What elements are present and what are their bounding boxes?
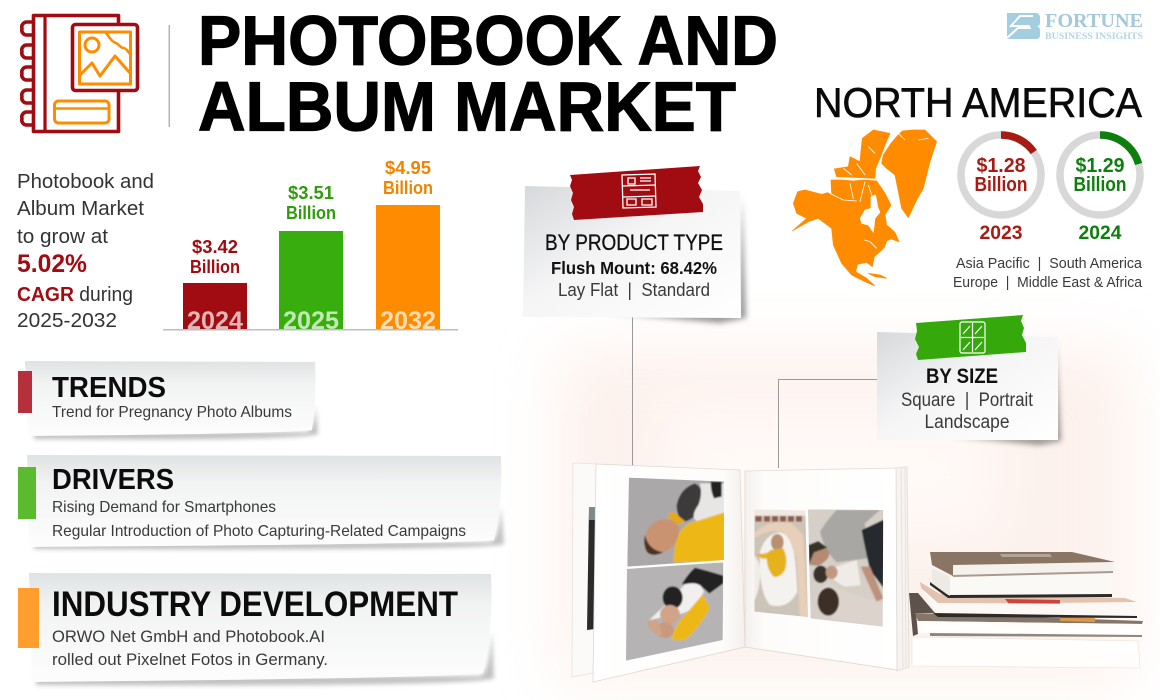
divider (168, 25, 170, 127)
bar 2032: $4.95 (385, 158, 431, 178)
bar 2025: $3.51 (288, 183, 334, 203)
bar 2024: $3.42 (192, 237, 238, 257)
bar 2032: Billion (383, 178, 433, 198)
text: market growth summary: 2025-2032 (17, 309, 117, 332)
title: PHOTOBOOK AND (198, 2, 778, 80)
bar chart: market size (183, 158, 440, 335)
panel: by size: Landscape (924, 412, 1010, 433)
panel: industry development: ORWO Net GmbH and Photobook.AI (52, 627, 325, 646)
tape: green (915, 315, 1026, 360)
donut: 2024 value: $1.29 (1076, 155, 1124, 177)
book 5 (912, 637, 1140, 668)
text: market growth summary: CAGR during (17, 283, 133, 306)
icon: photobook (22, 16, 138, 132)
icon: album layout (622, 174, 656, 208)
bar 2024: 2024 (187, 307, 243, 335)
photo: toddler kissing baby (623, 562, 727, 662)
bar 2032 (376, 158, 440, 335)
book 2 (930, 568, 1112, 598)
donut: 2023 value: 2023 (980, 223, 1022, 244)
photo: newborn in crib (753, 508, 809, 618)
panel: drivers: DRIVERS (52, 464, 174, 496)
bar 2032: 2032 (380, 307, 436, 335)
book 1 (930, 552, 1115, 577)
stack of books (909, 552, 1143, 668)
donut: 2023 value (961, 135, 1041, 244)
panel: by product type: BY PRODUCT TYPE (545, 230, 723, 255)
donut: 2024 value: 2024 (1078, 223, 1122, 244)
panel: trends: TRENDS (52, 372, 166, 404)
text: market growth summary: 5.02% (17, 250, 87, 278)
donut: 2023 value: Billion (974, 174, 1028, 196)
bar 2025 (279, 183, 343, 335)
text: market growth summary (17, 170, 154, 332)
text: market growth summary: to grow at (17, 225, 108, 248)
photo album (572, 463, 909, 682)
bar 2024 (183, 237, 247, 335)
panel: industry development: rolled out Pixelnet Fotos in Germany. (52, 650, 328, 669)
bar 2025: Billion (286, 203, 336, 223)
panel: drivers: Rising Demand for Smartphones (52, 499, 276, 516)
bar 2025: 2025 (283, 307, 339, 335)
panel: industry development (18, 573, 494, 685)
text: market growth summary: Photobook and (17, 170, 154, 193)
album back covers and page edges (572, 463, 909, 677)
photo: parents lying down (807, 508, 885, 628)
connector lines (632, 316, 878, 468)
panel: by product type (523, 166, 746, 323)
text: other regions (953, 255, 1143, 291)
book 3 (920, 582, 1137, 618)
album right page (745, 468, 897, 670)
panel: trends (18, 361, 318, 439)
icon: grid of photos (960, 322, 985, 353)
book 4 (909, 593, 1143, 637)
donut: 2024 value (1060, 135, 1140, 244)
panel: by product type: Lay Flat | Standard (558, 279, 710, 300)
map: North America (792, 130, 937, 286)
logo: Fortune Business Insights: BUSINESS INSIGHTS (1045, 32, 1143, 42)
bar 2024: Billion (190, 257, 240, 277)
heading: North America: NORTH AMERICA (814, 79, 1142, 126)
tape: red (570, 166, 703, 220)
logo: Fortune Business Insights (1007, 10, 1143, 42)
text: other regions: Asia Pacific | South America (956, 255, 1143, 272)
panel: trends: Trend for Pregnancy Photo Albums (52, 404, 292, 421)
donut: 2023 value: $1.28 (976, 155, 1026, 177)
panel: by size (877, 315, 1061, 445)
panel: drivers (18, 455, 504, 549)
album left page (593, 464, 745, 682)
panel: by product type: Flush Mount: 68.42% (551, 258, 717, 278)
donut: 2024 value: Billion (1074, 174, 1126, 196)
panel: by size: Square | Portrait (901, 390, 1034, 411)
panel: industry development: INDUSTRY DEVELOPMENT (52, 585, 458, 624)
title: ALBUM MARKET (198, 68, 736, 146)
panel: by size: BY SIZE (926, 365, 998, 388)
text: other regions: Europe | Middle East & Africa (953, 274, 1143, 291)
panel: drivers: Regular Introduction of Photo Capturing-Related Campaigns (52, 523, 466, 540)
photo: baby lying down (625, 475, 727, 568)
text: market growth summary: Album Market (17, 197, 144, 220)
title (198, 2, 778, 146)
logo: Fortune Business Insights: FORTUNE (1045, 10, 1143, 32)
